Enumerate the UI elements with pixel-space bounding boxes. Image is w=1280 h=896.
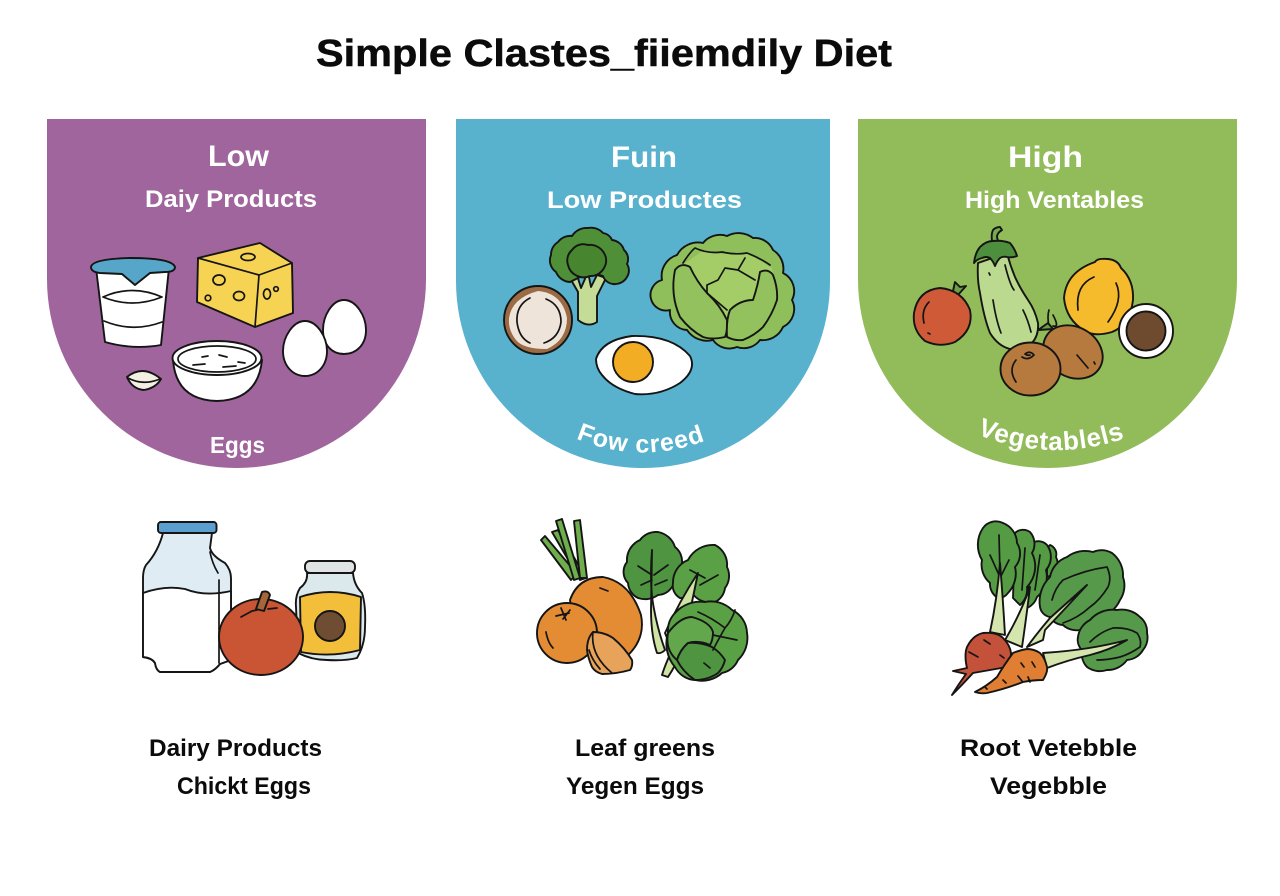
label block: dairy products, chickt eggs <box>149 735 322 800</box>
panel subheading: Low Productes: Low Productes <box>547 187 742 214</box>
icon: tall greens <box>978 521 1058 647</box>
illustration: milk bottle, apple and jar <box>143 522 365 675</box>
icon: broccoli <box>550 228 629 325</box>
icon: orange fruit <box>537 603 597 663</box>
icon: green cabbage <box>666 601 747 681</box>
panel caption: Eggs: Eggs <box>210 432 265 458</box>
illustration: orange roots and leaf greens <box>537 519 747 681</box>
icon: broad leaves <box>1027 550 1147 671</box>
icon: red apple <box>219 591 303 675</box>
label block: root vetebble, vegebble: Root Vetebble <box>960 735 1137 762</box>
panel heading: Low: Low <box>208 140 270 173</box>
panel subheading: Daiy Products: Daiy Products <box>145 186 317 213</box>
panel heading: Fuin: Fuin <box>611 141 677 174</box>
icon: orange slice <box>587 632 632 674</box>
icon: lettuce <box>650 233 794 349</box>
curved caption: Fow creed: Fow creed <box>578 423 704 453</box>
icon: two eggs <box>283 300 366 376</box>
label block: root vetebble, vegebble <box>960 735 1137 800</box>
icon: red beet <box>952 633 1011 695</box>
icon: leaf greens <box>624 532 729 677</box>
illustration: root vegetables with leaves <box>952 521 1147 695</box>
curved caption: Fow creed <box>578 423 704 453</box>
icon: cheese block <box>197 243 293 327</box>
icon: honey jar <box>296 561 365 660</box>
icon: bowl <box>172 341 262 401</box>
icon: yellow fruit <box>1064 259 1133 334</box>
icon: fried egg <box>596 336 692 394</box>
icon: brown kiwis <box>1000 310 1112 396</box>
panel shape: blue shield <box>456 119 830 468</box>
panel shape: green shield <box>858 119 1237 468</box>
label block: leaf greens, yegen eggs <box>566 735 715 800</box>
icon: red apple <box>914 282 971 345</box>
label block: leaf greens, yegen eggs: Leaf greens <box>575 735 715 762</box>
panel shape: purple shield <box>47 119 426 468</box>
icon: root stems <box>541 519 587 580</box>
title: Simple Clastes_fiiemdily Diet <box>316 33 892 75</box>
icon: halved coconut <box>1119 304 1173 358</box>
label block: root vetebble, vegebble: Vegebble <box>990 773 1107 800</box>
panel: fuin low products <box>456 119 830 468</box>
label block: leaf greens, yegen eggs: Yegen Eggs <box>566 773 704 800</box>
panel subheading: High Ventables: High Ventables <box>965 187 1144 214</box>
panel heading: High: High <box>1008 141 1083 174</box>
icon: coconut <box>504 286 572 354</box>
label block: dairy products, chickt eggs: Chickt Eggs <box>177 773 311 800</box>
curved caption: Vegetablels: Vegetablels <box>983 418 1123 452</box>
icon: eggplant <box>974 227 1038 349</box>
icon: yogurt cup <box>91 258 175 347</box>
icon: carrot <box>975 649 1047 693</box>
icon: small shell <box>127 371 161 390</box>
label block: dairy products, chickt eggs: Dairy Products <box>149 735 322 762</box>
icon: milk bottle <box>143 522 231 672</box>
panel: high vegetables <box>858 119 1237 468</box>
panel: low dairy products <box>47 119 426 468</box>
icon: orange root <box>570 577 642 660</box>
